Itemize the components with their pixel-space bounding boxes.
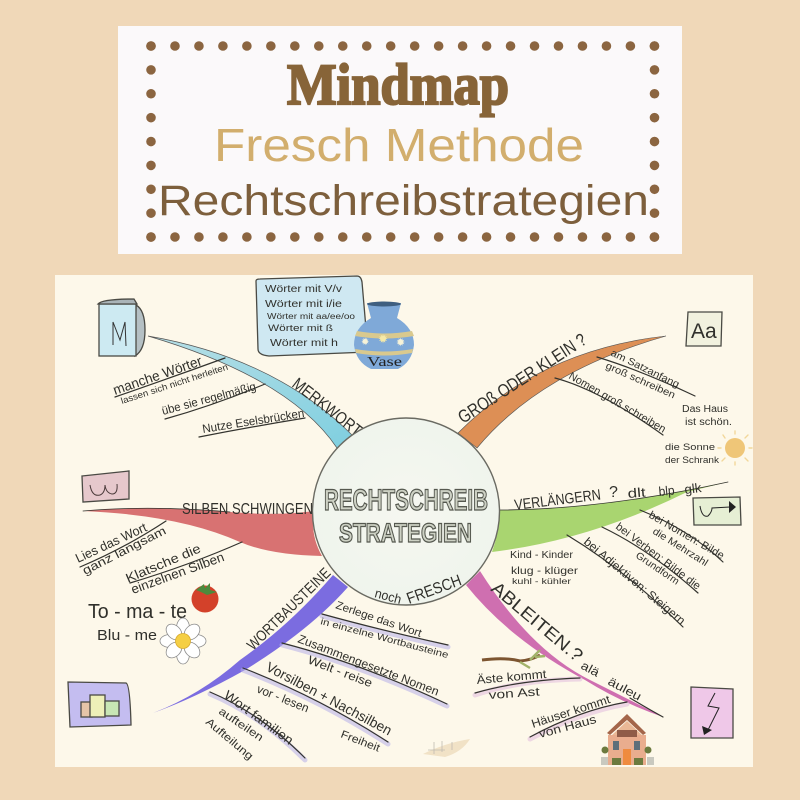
note: bei Adjektiven: bei Adjektiven: Steigern xyxy=(581,535,688,628)
examples: Das Haus ist schoen: ist schön. xyxy=(685,417,732,428)
note: bei Verben: Grundform xyxy=(633,550,681,587)
note: Haeuser kommt von Haus: Häuser kommt xyxy=(530,692,613,731)
icon: Aa box xyxy=(686,312,722,346)
note: Lies das Wort: Lies das Wort xyxy=(73,519,149,566)
note: Wortfamilien: Aufteilung xyxy=(203,716,255,763)
examples: Kind, klug, kuehl xyxy=(510,550,579,586)
note: Zusammengesetzte Nomen: Welt - reise xyxy=(306,653,375,690)
examples: To-ma-te, Blu-me: To - ma - te xyxy=(88,601,187,623)
note: Nutze Eselsbruecken: Nutze Eselsbrücken xyxy=(201,406,305,436)
icon: Aa box: Aa xyxy=(691,320,717,343)
examples: die Sonne, der Schrank: die Sonne xyxy=(665,442,715,452)
note: Wortfamilien: aufteilen xyxy=(216,706,265,744)
label: Wortbausteine: WORTBAUSTEINE xyxy=(244,565,334,654)
note: am Satzanfang: am Satzanfang xyxy=(609,348,681,391)
icon: house xyxy=(601,714,654,765)
branch: Ableiten xyxy=(466,571,663,741)
label: Silben schwingen: SILBEN SCHWINGEN xyxy=(182,501,313,518)
speech box: Woerter list: Wörter mit i/ie xyxy=(265,299,343,310)
central circle xyxy=(312,418,500,608)
heading: Mindmap: Mindmap xyxy=(287,52,509,117)
note: Zerlege das Wort xyxy=(319,599,450,661)
label: question mark and letter groups: glk xyxy=(684,480,703,497)
icon: w box xyxy=(82,471,129,502)
label: question mark and letter groups: blp xyxy=(658,483,675,499)
note: Aeste kommt von Ast: Äste kommt xyxy=(476,667,548,687)
icon: lightning box xyxy=(691,687,733,738)
note: uebe sie regelmaessig: übe sie regelmäßig xyxy=(160,379,257,418)
note: bei Nomen: die Mehrzahl xyxy=(650,526,710,569)
label: Verlaengern: VERLÄNGERN xyxy=(513,486,602,514)
note: manche Woerter: manche Wörter xyxy=(111,352,204,398)
icon: small sketch xyxy=(423,739,470,757)
note: Aeste kommt von Ast xyxy=(475,667,580,702)
label: question mark and letter groups xyxy=(609,480,703,501)
branch: Silben schwingen xyxy=(73,501,322,597)
icon: blocks box xyxy=(68,682,131,727)
icon: vase xyxy=(354,302,414,370)
icon: tomato xyxy=(192,583,218,612)
note: Vorsilben + Nachsilben: Vorsilben + Nachsilben xyxy=(264,659,395,738)
note: Haeuser kommt von Haus xyxy=(530,692,627,741)
icon: vase: ✹ xyxy=(361,337,369,348)
examples: Kind, klug, kuehl: klug - klüger xyxy=(511,566,579,577)
note: Wortfamilien xyxy=(203,687,305,763)
branch: Gross oder klein xyxy=(454,329,732,465)
note: bei Nomen: bei Nomen: Bilde xyxy=(646,509,726,562)
note: manche Woerter xyxy=(111,352,229,406)
central title: Strategien: STRATEGIEN xyxy=(339,518,472,548)
note: Haeuser kommt von Haus: von Haus xyxy=(537,712,598,741)
icon: arrow box xyxy=(693,497,741,525)
speech box: Woerter list: Wörter mit V/v xyxy=(265,284,342,295)
note: am Satzanfang xyxy=(597,348,695,401)
panel: mind map background xyxy=(55,275,753,767)
speech box: Woerter list xyxy=(256,276,368,356)
note: Wortfamilien: Wort familien xyxy=(221,687,296,748)
branch: Wortbausteine xyxy=(153,565,450,763)
icon: branch xyxy=(482,650,545,668)
icon: vase: Vase xyxy=(367,355,402,370)
label: noch: noch xyxy=(373,585,403,607)
examples: To-ma-te, Blu-me: Blu - me xyxy=(97,627,157,644)
label: Fresch: FRESCH xyxy=(405,572,464,608)
label: Ableiten: ABLEITEN.? xyxy=(487,578,587,666)
examples: Das Haus ist schoen: Das Haus xyxy=(682,404,728,415)
icon: vase: ✹ xyxy=(396,337,405,349)
note: Nomen gross schreiben: Nomen groß schreiben xyxy=(566,370,668,436)
icon: flower xyxy=(160,618,206,664)
label: question mark and letter groups: ? xyxy=(609,484,618,501)
examples: die Sonne, der Schrank xyxy=(665,442,720,465)
title card xyxy=(118,26,682,254)
note: manche Woerter: lassen sich nicht herleiten xyxy=(120,362,229,406)
speech box: Woerter list: Wörter mit ß xyxy=(268,323,334,333)
heading: Fresch Methode: Fresch Methode xyxy=(214,119,584,171)
note: Lies das Wort: ganz langsam xyxy=(80,523,168,578)
note: Aeste kommt von Ast: von Ast xyxy=(488,684,541,702)
note: bei Verben: bei Verben: Bilde die xyxy=(613,521,703,592)
dotted frame xyxy=(151,46,657,239)
note: Klatsche die einzelnen Silben: Klatsche die xyxy=(123,541,203,586)
examples: To-ma-te, Blu-me xyxy=(88,601,187,644)
label: Gross oder klein: GROß ODER KLEIN ? xyxy=(454,329,590,427)
heading: Rechtschreibstrategien: Rechtschreibstrategien xyxy=(158,177,649,225)
note: Zusammengesetzte Nomen: Zusammengesetzte Nomen xyxy=(296,632,441,699)
examples: die Sonne, der Schrank: der Schrank xyxy=(665,455,720,465)
label: question mark and letter groups: dlt xyxy=(627,484,647,501)
label: ae aeu: äuleu xyxy=(606,674,644,704)
note: Klatsche die einzelnen Silben: einzelnen Silben xyxy=(129,549,226,597)
branch: Merkwort xyxy=(111,336,366,448)
central title: Rechtschreib: RECHTSCHREIB xyxy=(324,484,488,517)
note: Vorsilben + Nachsilben: vor - lesen xyxy=(255,682,311,715)
branch: Verlaengern xyxy=(492,480,728,628)
label: Merkwort: MERKWORT xyxy=(289,374,366,440)
label: ae aeu: alä xyxy=(579,658,602,680)
icon: vase: ✹ xyxy=(378,332,388,346)
icon: sun xyxy=(718,431,752,465)
examples: Kind, klug, kuehl: kuhl - kühler xyxy=(512,577,571,586)
speech box: Woerter list: Wörter mit h xyxy=(270,338,338,349)
note: Zerlege das Wort: Zerlege das Wort xyxy=(334,599,423,640)
examples: Kind, klug, kuehl: Kind - Kinder xyxy=(510,550,574,561)
note: Klatsche die einzelnen Silben xyxy=(123,541,242,597)
note: Lies das Wort xyxy=(73,519,168,578)
label: ae aeu xyxy=(579,658,644,704)
note: am Satzanfang: groß schreiben xyxy=(604,361,677,401)
note: Vorsilben + Nachsilben: Freiheit xyxy=(339,729,382,754)
examples: Das Haus ist schoen xyxy=(682,404,732,428)
icon: M book xyxy=(98,299,145,356)
speech box: Woerter list: Wörter mit aa/ee/oo xyxy=(267,312,356,321)
note: Zerlege das Wort: in einzelne Wortbausteine xyxy=(319,616,450,661)
